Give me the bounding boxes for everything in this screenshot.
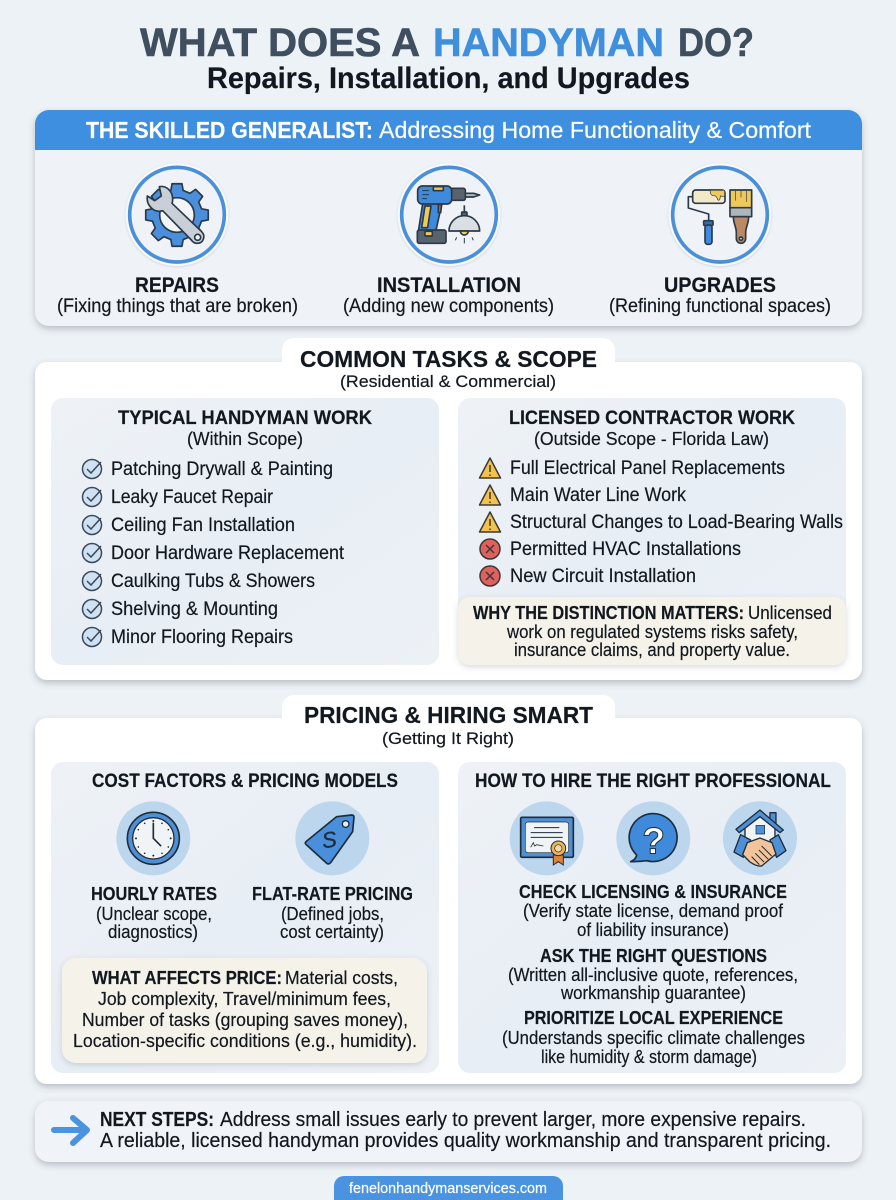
- panel: common tasks and scope: [35, 338, 862, 680]
- repairs label: REPAIRS: [135, 274, 219, 297]
- prioritize local experience: PRIORITIZE LOCAL EXPERIENCE: [524, 1007, 783, 1028]
- ask the right questions: [508, 945, 798, 1003]
- title: WHAT DOES A: [140, 21, 420, 65]
- callout: why the distinction matters: Unlicensed: [748, 603, 832, 623]
- flat rate pricing: cost certainty): [280, 922, 384, 942]
- next steps text: NEXT STEPS:: [100, 1109, 214, 1131]
- panel: next steps: [35, 1101, 862, 1162]
- next steps text: Address small issues early to prevent larger, more expensive repairs.: [220, 1109, 806, 1131]
- flat rate pricing: (Defined jobs,: [281, 904, 384, 924]
- warning list: [480, 458, 843, 587]
- check list: [82, 459, 345, 648]
- footer website pill: fenelonhandymanservices.com: [349, 1180, 547, 1197]
- warning list: Full Electrical Panel Replacements: [510, 458, 785, 479]
- check list: Shelving & Mounting: [111, 599, 278, 620]
- heading: pricing: [304, 702, 593, 748]
- warning list: Permitted HVAC Installations: [510, 539, 741, 560]
- title: Repairs, Installation, and Upgrades: [207, 62, 690, 95]
- icon: certificate: [510, 801, 584, 875]
- panel: pricing and hiring smart: [35, 695, 862, 1084]
- check list: Door Hardware Replacement: [111, 543, 345, 564]
- icon: house and handshake: [723, 801, 797, 875]
- callout: what affects price: Material costs,: [285, 968, 398, 988]
- panel: how to hire: HOW TO HIRE THE RIGHT PROFESSIONAL: [475, 771, 831, 792]
- prioritize local experience: like humidity & storm damage): [541, 1047, 757, 1067]
- check list: Caulking Tubs & Showers: [111, 571, 315, 592]
- icon: repairs gear and wrench: [126, 163, 228, 266]
- hourly rates: HOURLY RATES: [91, 883, 217, 904]
- heading: common tasks: COMMON TASKS & SCOPE: [300, 346, 597, 372]
- callout: why the distinction matters: insurance claims, and property value.: [514, 640, 790, 660]
- panel: how to hire: [458, 762, 846, 1073]
- warning list: Structural Changes to Load-Bearing Walls: [510, 512, 843, 533]
- icon: upgrades roller and brush: [669, 163, 771, 266]
- next steps text: [100, 1109, 831, 1152]
- upgrades label: [609, 274, 831, 317]
- icon: arrow: [54, 1118, 87, 1143]
- title: [140, 21, 754, 95]
- title: DO?: [678, 21, 754, 65]
- panel: licensed contractor work: LICENSED CONTRACTOR WORK: [509, 407, 795, 429]
- installation label: INSTALLATION: [377, 274, 521, 297]
- check list: Leaky Faucet Repair: [111, 487, 274, 508]
- heading: pricing: (Getting It Right): [382, 729, 514, 748]
- ask the right questions: (Written all-inclusive quote, references,: [508, 965, 798, 985]
- icon: clock: [116, 801, 190, 875]
- check list: Ceiling Fan Installation: [111, 515, 295, 536]
- callout: what affects price: Location-specific conditions (e.g., humidity).: [73, 1031, 417, 1051]
- icon: question bubble: [616, 801, 690, 875]
- installation label: [343, 274, 554, 317]
- ask the right questions: workmanship guarantee): [560, 983, 746, 1003]
- repairs label: (Fixing things that are broken): [57, 296, 298, 317]
- callout: why the distinction matters: WHY THE DISTINCTION MATTERS:: [473, 603, 744, 623]
- banner header: THE SKILLED GENERALIST:: [86, 117, 373, 143]
- ask the right questions: ASK THE RIGHT QUESTIONS: [540, 945, 767, 966]
- check list: Patching Drywall & Painting: [111, 459, 333, 480]
- check licensing: of liability insurance): [577, 920, 729, 940]
- callout: why the distinction matters: work on regulated systems risks safety,: [506, 622, 798, 642]
- icon: price tag: S: [320, 826, 339, 853]
- flat rate pricing: [252, 883, 413, 942]
- warning list: New Circuit Installation: [510, 566, 696, 587]
- check licensing: [519, 881, 787, 940]
- callout: why the distinction matters: [458, 597, 846, 665]
- panel: typical handyman work: (Within Scope): [187, 429, 303, 449]
- callout: what affects price: Job complexity, Travel/minimum fees,: [98, 989, 391, 1009]
- next steps text: A reliable, licensed handyman provides quality workmanship and transparent pricing.: [100, 1130, 831, 1152]
- heading: common tasks: [300, 346, 597, 391]
- callout: what affects price: [62, 958, 427, 1063]
- heading: pricing: PRICING & HIRING SMART: [304, 702, 593, 728]
- icon: question bubble: ?: [642, 819, 665, 861]
- warning list: Main Water Line Work: [510, 485, 686, 506]
- check licensing: (Verify state license, demand proof: [523, 901, 784, 921]
- hourly rates: diagnostics): [108, 922, 198, 942]
- callout: what affects price: Number of tasks (grouping saves money),: [82, 1010, 408, 1030]
- heading: common tasks: (Residential & Commercial): [340, 372, 556, 391]
- icon: price tag: [295, 801, 369, 875]
- panel: typical handyman work: TYPICAL HANDYMAN WORK: [118, 407, 372, 429]
- banner header: [35, 110, 862, 150]
- panel: the skilled generalist: [35, 110, 862, 326]
- panel: licensed contractor work: [458, 398, 846, 665]
- repairs label: [57, 274, 298, 317]
- icon: installation drill and lamp: [398, 163, 500, 266]
- flat rate pricing: FLAT-RATE PRICING: [252, 883, 413, 904]
- footer website pill: [334, 1176, 563, 1200]
- panel: cost factors: COST FACTORS & PRICING MODELS: [92, 771, 398, 792]
- panel: typical handyman work: [51, 398, 439, 665]
- banner header: Addressing Home Functionality & Comfort: [379, 117, 812, 143]
- check list: Minor Flooring Repairs: [111, 627, 293, 648]
- upgrades label: UPGRADES: [664, 274, 776, 297]
- upgrades label: (Refining functional spaces): [609, 296, 831, 317]
- panel: licensed contractor work: (Outside Scope - Florida Law): [534, 429, 769, 449]
- callout: what affects price: WHAT AFFECTS PRICE:: [92, 968, 282, 988]
- hourly rates: (Unclear scope,: [96, 904, 212, 924]
- prioritize local experience: [502, 1007, 805, 1067]
- hourly rates: [91, 883, 217, 942]
- check licensing: CHECK LICENSING & INSURANCE: [519, 881, 787, 902]
- title: HANDYMAN: [433, 21, 664, 65]
- installation label: (Adding new components): [343, 296, 554, 317]
- prioritize local experience: (Understands specific climate challenges: [502, 1028, 805, 1048]
- panel: cost factors: [51, 762, 439, 1073]
